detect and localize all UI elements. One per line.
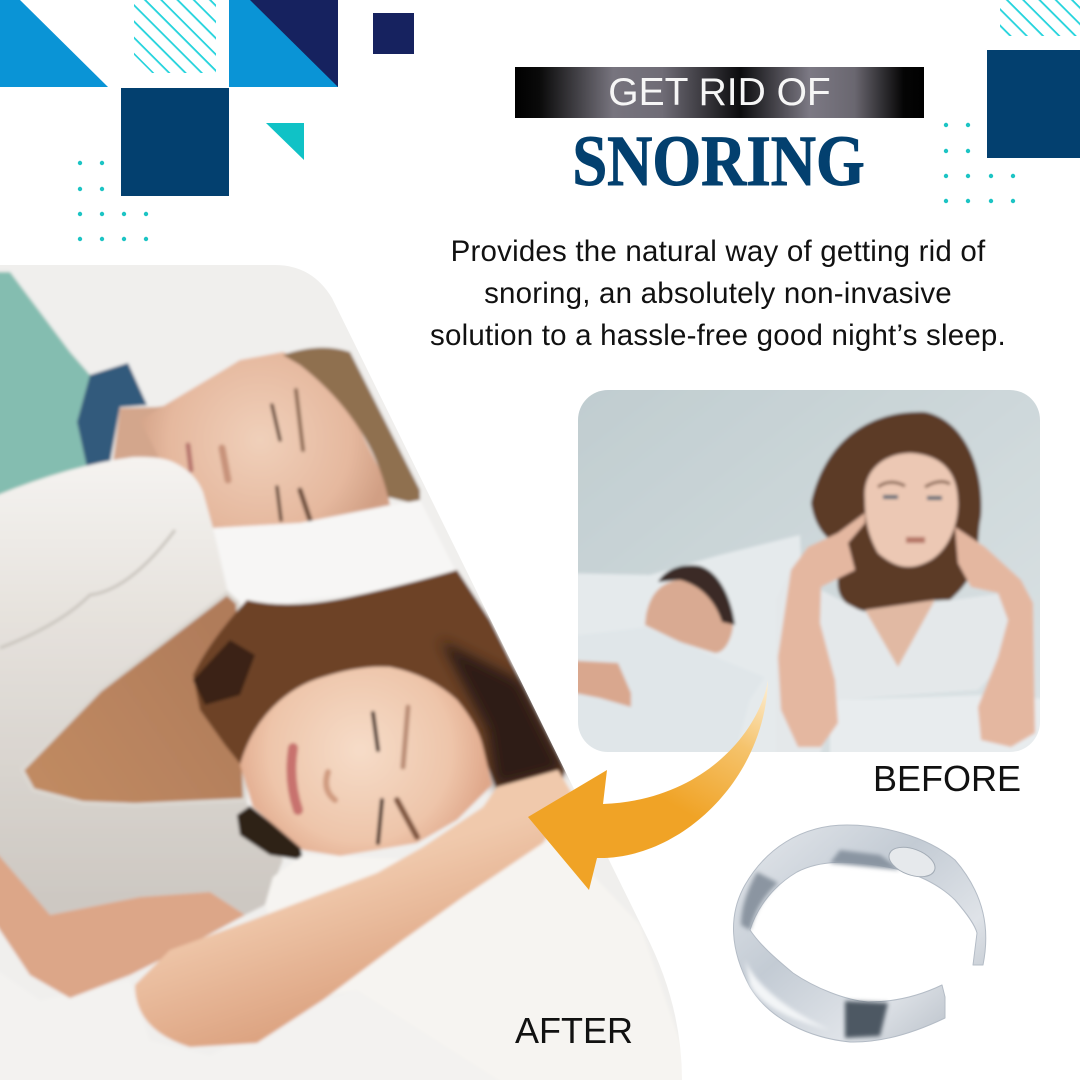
- man's hand: [578, 659, 633, 708]
- dot grid right: [944, 123, 1015, 203]
- before photo: woman covering ears: [578, 390, 1040, 752]
- foreground bed sheet: [830, 695, 1040, 752]
- bed and pillow: [578, 535, 802, 752]
- description text: [430, 235, 1006, 352]
- woman's neckline: [865, 600, 935, 667]
- man's face: [140, 352, 390, 528]
- woman's eyes, brows and mouth: [878, 482, 950, 540]
- man's hair: [283, 348, 420, 505]
- man's hair: [658, 565, 735, 625]
- curved orange arrow: [528, 680, 768, 890]
- woman's left arm and hand: [778, 513, 865, 747]
- woman's lower hand and forearm: [0, 845, 245, 998]
- woman's shirt: [810, 591, 1007, 752]
- blanket: [560, 627, 765, 770]
- woman's chest and neck: [22, 593, 245, 805]
- shirt folds: [0, 530, 175, 648]
- dark hair shadow: [440, 640, 565, 788]
- dot grid left: [78, 161, 148, 241]
- woman's facial features: [291, 707, 417, 843]
- man's facial features: [188, 390, 310, 520]
- description text: Provides the natural way of getting rid of: [451, 235, 985, 268]
- front pillow: [266, 854, 306, 900]
- label: before: BEFORE: [873, 758, 1021, 799]
- after photo: sleeping couple: [0, 255, 700, 1080]
- woman's hair: [193, 570, 565, 790]
- heading: get rid of: GET RID OF: [608, 71, 831, 114]
- bottom sheet: [0, 965, 530, 1080]
- top right geometric shapes: [987, 0, 1080, 158]
- woman's face: [240, 667, 492, 856]
- hair beneath neck: [237, 806, 303, 860]
- man's face: [645, 580, 733, 653]
- man's neck: [112, 405, 164, 462]
- heading: snoring: SNORING: [572, 121, 865, 201]
- heading bar: [515, 67, 924, 118]
- woman's right arm and hand: [955, 527, 1035, 747]
- woman's hair: [811, 412, 982, 612]
- woman's face: [865, 453, 958, 567]
- top left geometric shapes: [0, 0, 414, 196]
- ring shading: [741, 872, 778, 930]
- woman's upper arm: [135, 770, 573, 1047]
- man's navy collar: [77, 363, 147, 472]
- man's teal shirt: [0, 272, 90, 498]
- description text: solution to a hassle-free good night’s sleep.: [430, 319, 1006, 352]
- label: after: AFTER: [515, 1010, 633, 1051]
- description text: snoring, an absolutely non-invasive: [484, 277, 952, 310]
- silver anti-snoring ring: [734, 825, 986, 1042]
- back pillow: [216, 498, 422, 531]
- woman's white shirt: [0, 457, 283, 915]
